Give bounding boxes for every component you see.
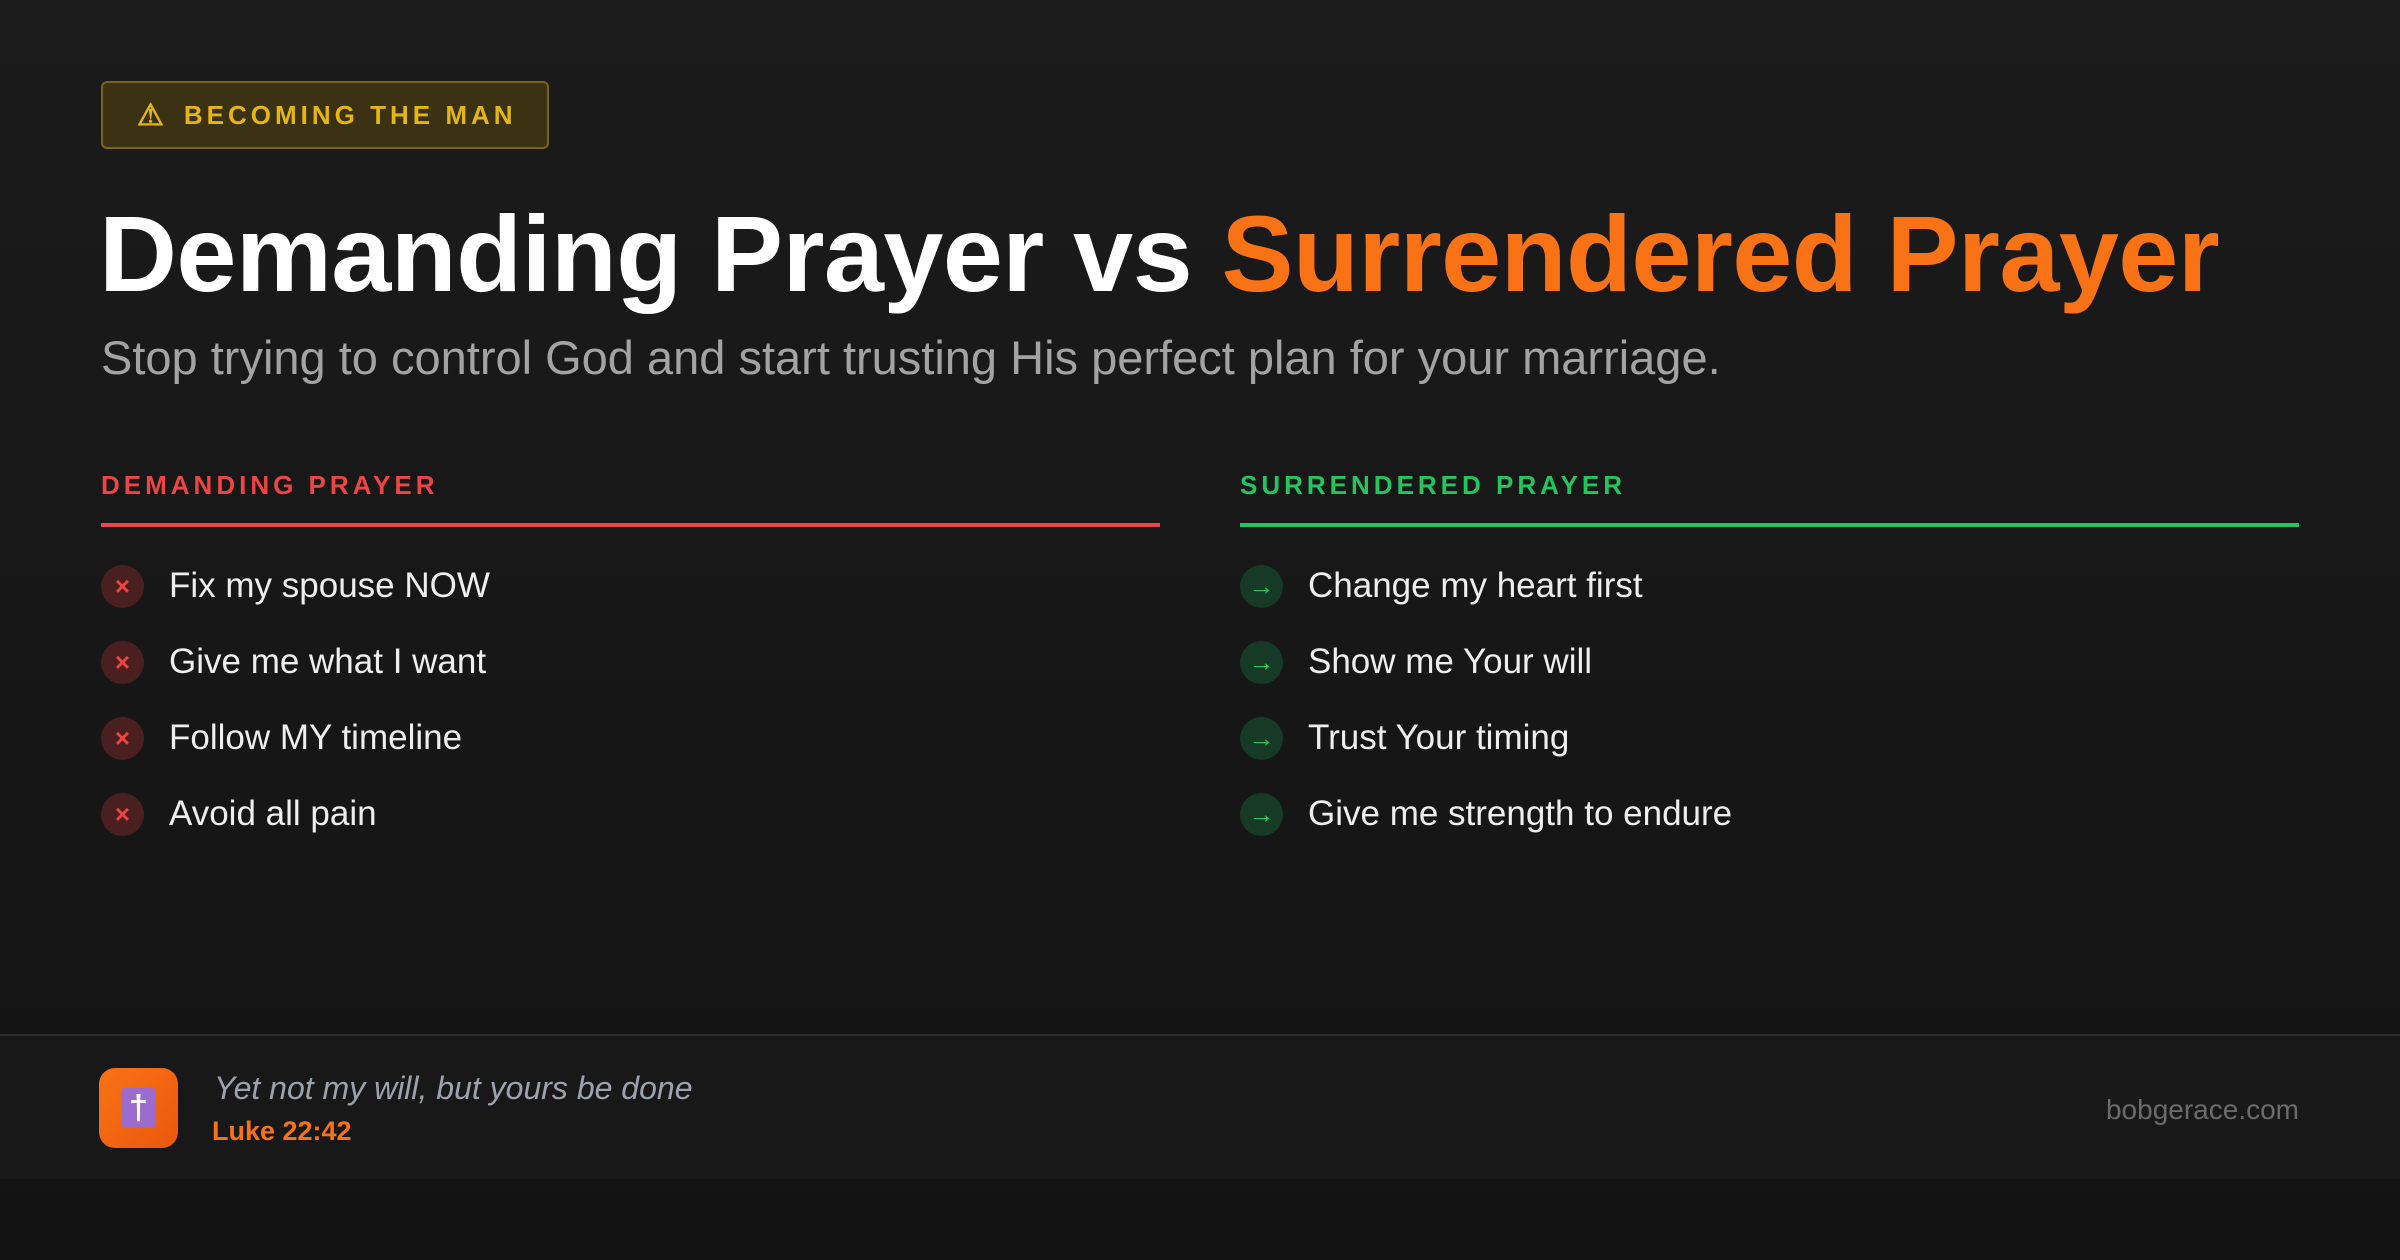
- heading: surrendered: SURRENDERED PRAYER: [1240, 470, 1626, 500]
- item: →: [1248, 798, 1274, 828]
- quote: Yet not my will, but yours be done: [214, 1070, 692, 1106]
- item: Fix my spouse NOW: [169, 566, 490, 605]
- item: Change my heart first: [1308, 566, 1643, 605]
- item: Show me Your will: [1308, 642, 1592, 681]
- panel: surrendered prayer: [1240, 470, 2299, 836]
- item: ×: [115, 798, 130, 828]
- icon: cross: [99, 1068, 178, 1148]
- item: Give me strength to endure: [1308, 794, 1732, 833]
- item: ×: [115, 722, 130, 752]
- item: Trust Your timing: [1308, 718, 1569, 757]
- item: Follow MY timeline: [169, 718, 462, 757]
- heading: demanding: DEMANDING PRAYER: [101, 470, 439, 500]
- footer: [0, 1034, 2400, 1179]
- badge: BECOMING THE MAN: [184, 100, 517, 130]
- heading: surrendered: [1240, 470, 2299, 527]
- item: ×: [115, 646, 130, 676]
- title: Demanding Prayer vs Surrendered Prayer: [99, 193, 2219, 314]
- reference: Luke 22:42: [212, 1116, 352, 1146]
- badge: [101, 81, 549, 149]
- item: →: [1248, 570, 1274, 600]
- item: →: [1248, 646, 1274, 676]
- item: →: [1248, 722, 1274, 752]
- subtitle: Stop trying to control God and start trusting His perfect plan for your marriage.: [101, 331, 1721, 384]
- icon: cross: †: [129, 1088, 148, 1126]
- item: ×: [115, 570, 130, 600]
- item: Give me what I want: [169, 642, 486, 681]
- badge: ⚠: [137, 98, 168, 132]
- item: [101, 793, 377, 836]
- website: bobgerace.com: [2106, 1094, 2299, 1125]
- heading: demanding: [101, 470, 1160, 527]
- item: Avoid all pain: [169, 794, 377, 833]
- panel: demanding prayer: [101, 470, 1160, 836]
